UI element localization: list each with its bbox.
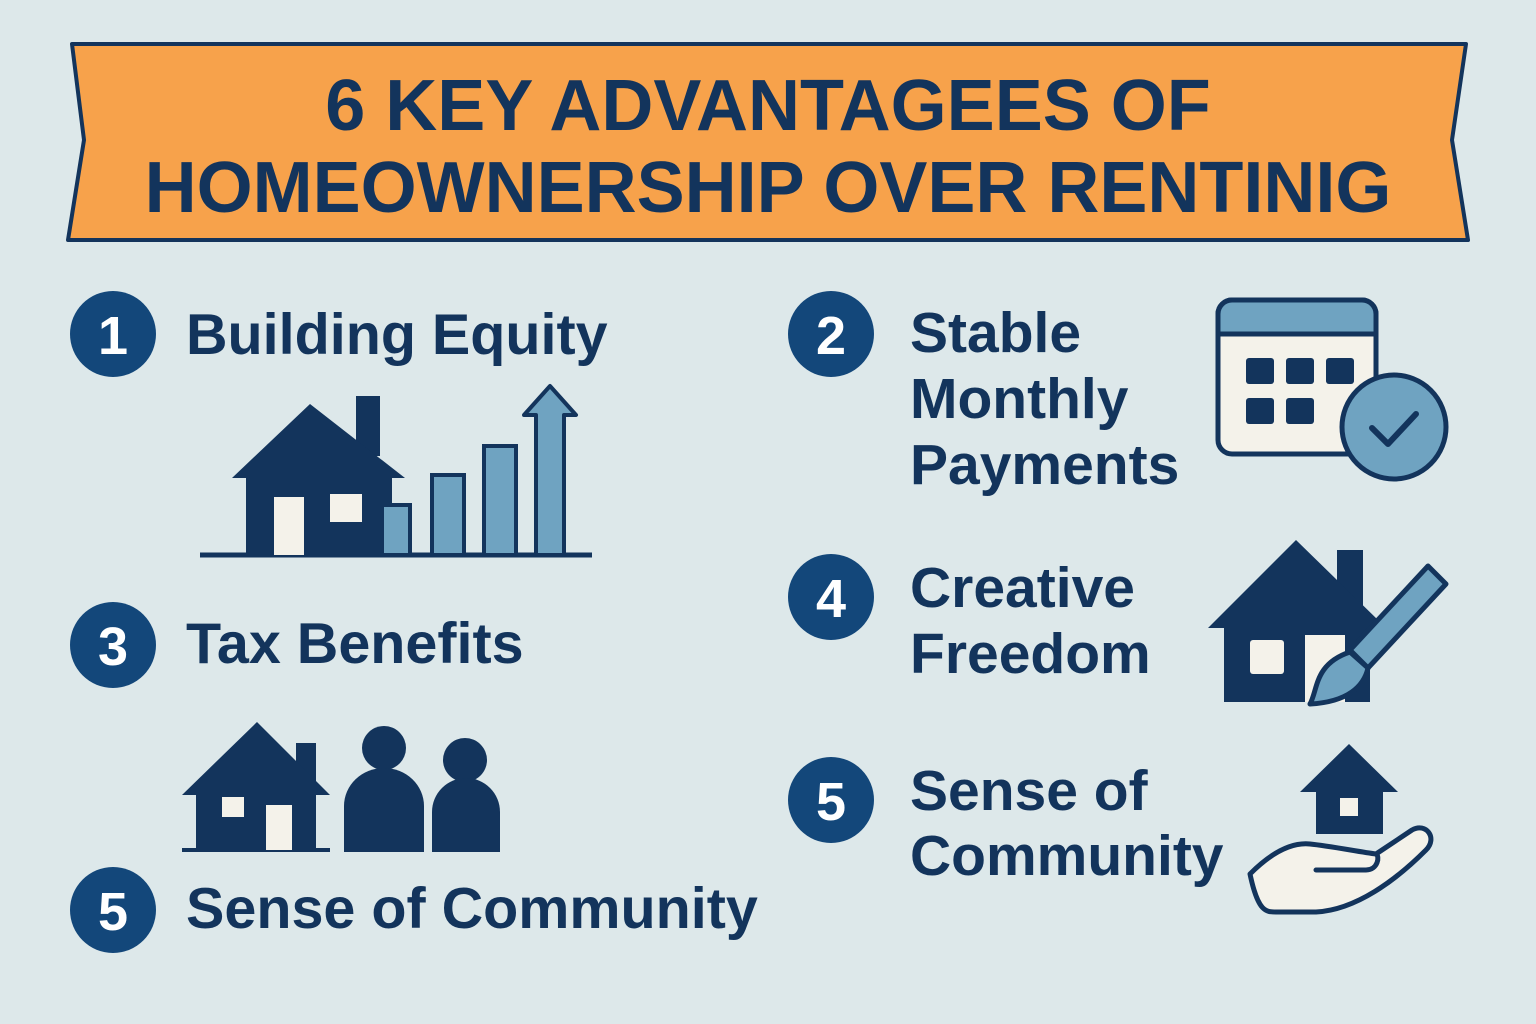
icon: house with paintbrush — [1208, 540, 1446, 704]
item 2: stable monthly payments: Stable — [910, 301, 1081, 365]
item 5 left: sense of community — [70, 867, 758, 953]
item 4: creative freedom: Freedom — [910, 622, 1151, 686]
icon: house and people — [182, 722, 500, 852]
item 3: tax benefits: Tax Benefits — [186, 612, 524, 676]
item 1: building equity: 1 — [98, 306, 128, 366]
item 4: creative freedom: Creative — [910, 556, 1135, 620]
item 2: stable monthly payments: Payments — [910, 433, 1179, 497]
item 5 right: sense of community: Community — [910, 824, 1224, 888]
title banner — [68, 44, 1468, 240]
item 5 right: sense of community: Sense of — [910, 759, 1149, 823]
item 4: creative freedom: 4 — [816, 569, 846, 629]
item 1: building equity — [70, 291, 608, 377]
item 5 left: sense of community: 5 — [98, 882, 128, 942]
icon: house with rising bars — [200, 386, 592, 555]
item 5 left: sense of community: Sense of Community — [186, 877, 758, 941]
item 3: tax benefits — [70, 602, 524, 688]
item 5 right: sense of community: 5 — [816, 772, 846, 832]
icon: hand holding house — [1250, 744, 1431, 912]
item 1: building equity: Building Equity — [186, 303, 608, 367]
item 2: stable monthly payments — [788, 291, 1179, 497]
item 5 right: sense of community — [788, 757, 1224, 888]
item 2: stable monthly payments: 2 — [816, 306, 846, 366]
item 4: creative freedom — [788, 554, 1151, 686]
title banner: HOMEOWNERSHIP OVER RENTINIG — [145, 148, 1391, 228]
item 3: tax benefits: 3 — [98, 617, 128, 677]
title banner: 6 KEY ADVANTAGEES OF — [325, 66, 1211, 146]
item 2: stable monthly payments: Monthly — [910, 367, 1129, 431]
icon: calendar with check — [1218, 300, 1446, 479]
